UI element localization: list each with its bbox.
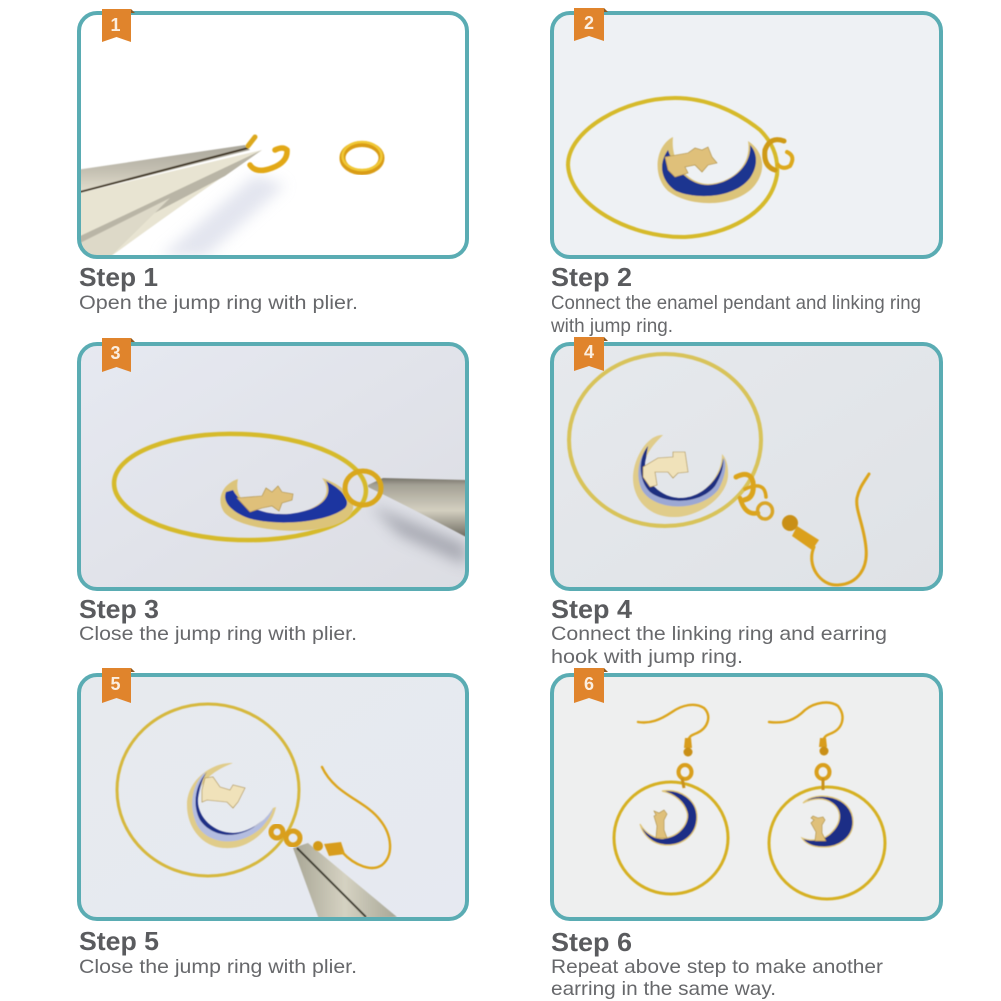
icon: left earring [614, 705, 728, 894]
icon: moon pendant [187, 763, 276, 848]
step 5 photo [79, 675, 467, 922]
icon: earring hook [313, 767, 390, 868]
badge 1: 1 [110, 15, 121, 35]
step 5 frame [79, 675, 467, 919]
panel: step 3 [79, 338, 467, 645]
step 2 frame [552, 13, 941, 257]
step 4 heading: Step 4 [551, 594, 633, 624]
step 6 frame [552, 675, 941, 919]
icon: pliers [76, 145, 262, 257]
step 3 frame [79, 344, 467, 589]
step 3 description: Close the jump ring with plier. [79, 623, 357, 645]
badge 5 [102, 668, 135, 703]
icon: jump ring [345, 471, 381, 505]
panel: step 5 [79, 668, 467, 978]
icon: linking ring [112, 430, 368, 544]
step 6 description: Repeat above step to make another [551, 956, 884, 978]
step 1 photo [81, 134, 386, 255]
step 4 description line 2: hook with jump ring. [551, 646, 743, 668]
step 5 heading: Step 5 [79, 926, 159, 956]
icon: pliers [293, 843, 397, 922]
icon: jump rings [736, 474, 772, 519]
step 2 description line 2: with jump ring. [550, 315, 673, 337]
step 2 description: Connect the enamel pendant and linking ring [551, 292, 921, 314]
step 4 description: Connect the linking ring and earring [551, 623, 887, 645]
step 6 photo [552, 675, 941, 919]
icon: open jump ring [248, 137, 287, 170]
icon: jump ring [765, 140, 792, 170]
icon: moon pendant [220, 478, 353, 531]
icon: moon pendant [658, 137, 762, 203]
step 6 heading: Step 6 [551, 927, 632, 957]
step 4 frame [552, 344, 941, 589]
step 2 heading: Step 2 [551, 262, 632, 292]
step 6 description line 2: earring in the same way. [551, 978, 776, 1000]
plier shadow [160, 175, 285, 257]
step 2 photo [552, 13, 941, 257]
step 5 description: Close the jump ring with plier. [79, 956, 357, 978]
icon: earring hook [782, 474, 869, 585]
panel: step 2 [550, 8, 941, 337]
step 3 heading: Step 3 [79, 594, 159, 624]
panel: step 1 [76, 9, 467, 314]
icon: moon pendant [633, 435, 728, 517]
badge 6 [574, 668, 608, 703]
icon: closed jump ring [342, 142, 382, 172]
badge 3: 3 [110, 343, 121, 363]
step 3 photo [79, 344, 467, 589]
icon: pliers [368, 478, 466, 537]
badge 4 [574, 337, 608, 371]
badge 5: 5 [110, 674, 121, 694]
panel: step 4 [551, 337, 941, 668]
icon: right earring [769, 703, 885, 899]
badge 2: 2 [584, 13, 594, 33]
badge 3 [102, 338, 135, 372]
icon: linking ring [569, 354, 761, 526]
badge 6: 6 [584, 674, 594, 694]
step 1 description: Open the jump ring with plier. [79, 292, 358, 314]
step 1 heading: Step 1 [79, 262, 158, 292]
badge 1 [102, 9, 135, 42]
panel: step 6 [551, 668, 941, 1000]
icon: linking ring [117, 704, 299, 876]
badge 4: 4 [584, 342, 594, 362]
plier shadow [370, 505, 466, 565]
step 1 frame [79, 13, 467, 257]
badge 2 [574, 8, 608, 41]
icon: linking ring [568, 98, 777, 237]
icon: jump rings [271, 826, 300, 845]
step 4 photo [552, 344, 941, 589]
